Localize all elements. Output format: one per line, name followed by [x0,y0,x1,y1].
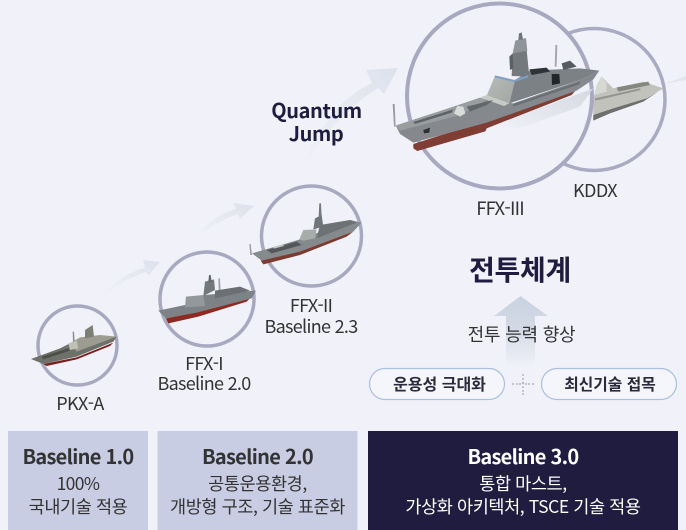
panel: Baseline 2.0 [158,431,358,530]
panel: Baseline 2.0: 공통운용환경, [208,471,307,496]
panel: Baseline 1.0: Baseline 1.0 [22,441,134,470]
label: FFX-III: FFX-III [476,195,524,221]
label: FFX-II Baseline 2.3: Baseline 2.3 [264,313,358,339]
text: capability improvement: 전투 능력 향상 [468,321,575,347]
pill: latest technology: 최신기술 접목 [564,372,656,395]
panel: Baseline 3.0: Baseline 3.0 [467,441,579,470]
heading: combat system: 전투체계 [469,249,571,289]
panel: Baseline 2.0: Baseline 2.0 [202,441,313,470]
panel: Baseline 3.0 [368,431,678,530]
ship: FFX-I with circle [158,252,256,346]
arrow: FFX-I to FFX-II [195,203,254,240]
label: FFX-I Baseline 2.0: FFX-I [185,350,223,376]
panel: Baseline 3.0: 통합 마스트, [479,471,567,496]
arrow: PKX-A to FFX-I [100,260,160,298]
arrow: FFX-II to FFX-III [300,68,398,172]
label: FFX-II Baseline 2.3 [264,292,358,339]
label: FFX-I Baseline 2.0: Baseline 2.0 [157,370,251,396]
heading: Quantum Jump [271,95,362,147]
panel: Baseline 2.0: 개방형 구조, 기술 표준화 [170,494,345,519]
arrow: upward capability [494,296,548,368]
label: PKX-A: PKX-A [56,390,104,416]
label: FFX-I Baseline 2.0 [157,350,251,396]
panel: Baseline 1.0: 국내기술 적용 [29,494,128,519]
icon: dotted plus [512,374,534,395]
ship: FFX-II with circle [249,186,362,286]
heading: Quantum Jump: Quantum [271,95,362,124]
ship: PKX-A with circle [31,306,117,385]
ship: KDDX with circle [523,28,686,170]
heading: Quantum Jump: Jump [289,118,343,147]
label: FFX-II Baseline 2.3: FFX-II [290,292,332,318]
pill: maximize operability [370,368,504,400]
label: KDDX: KDDX [573,177,618,203]
panel: Baseline 3.0: 가상화 아키텍처, TSCE 기술 적용 [405,494,641,519]
pill: latest technology [542,368,676,400]
ship: FFX-III with circle [393,4,599,188]
panel: Baseline 1.0 [8,431,148,530]
pill: maximize operability: 운용성 극대화 [393,371,486,395]
panel: Baseline 1.0: 100% [57,471,100,496]
